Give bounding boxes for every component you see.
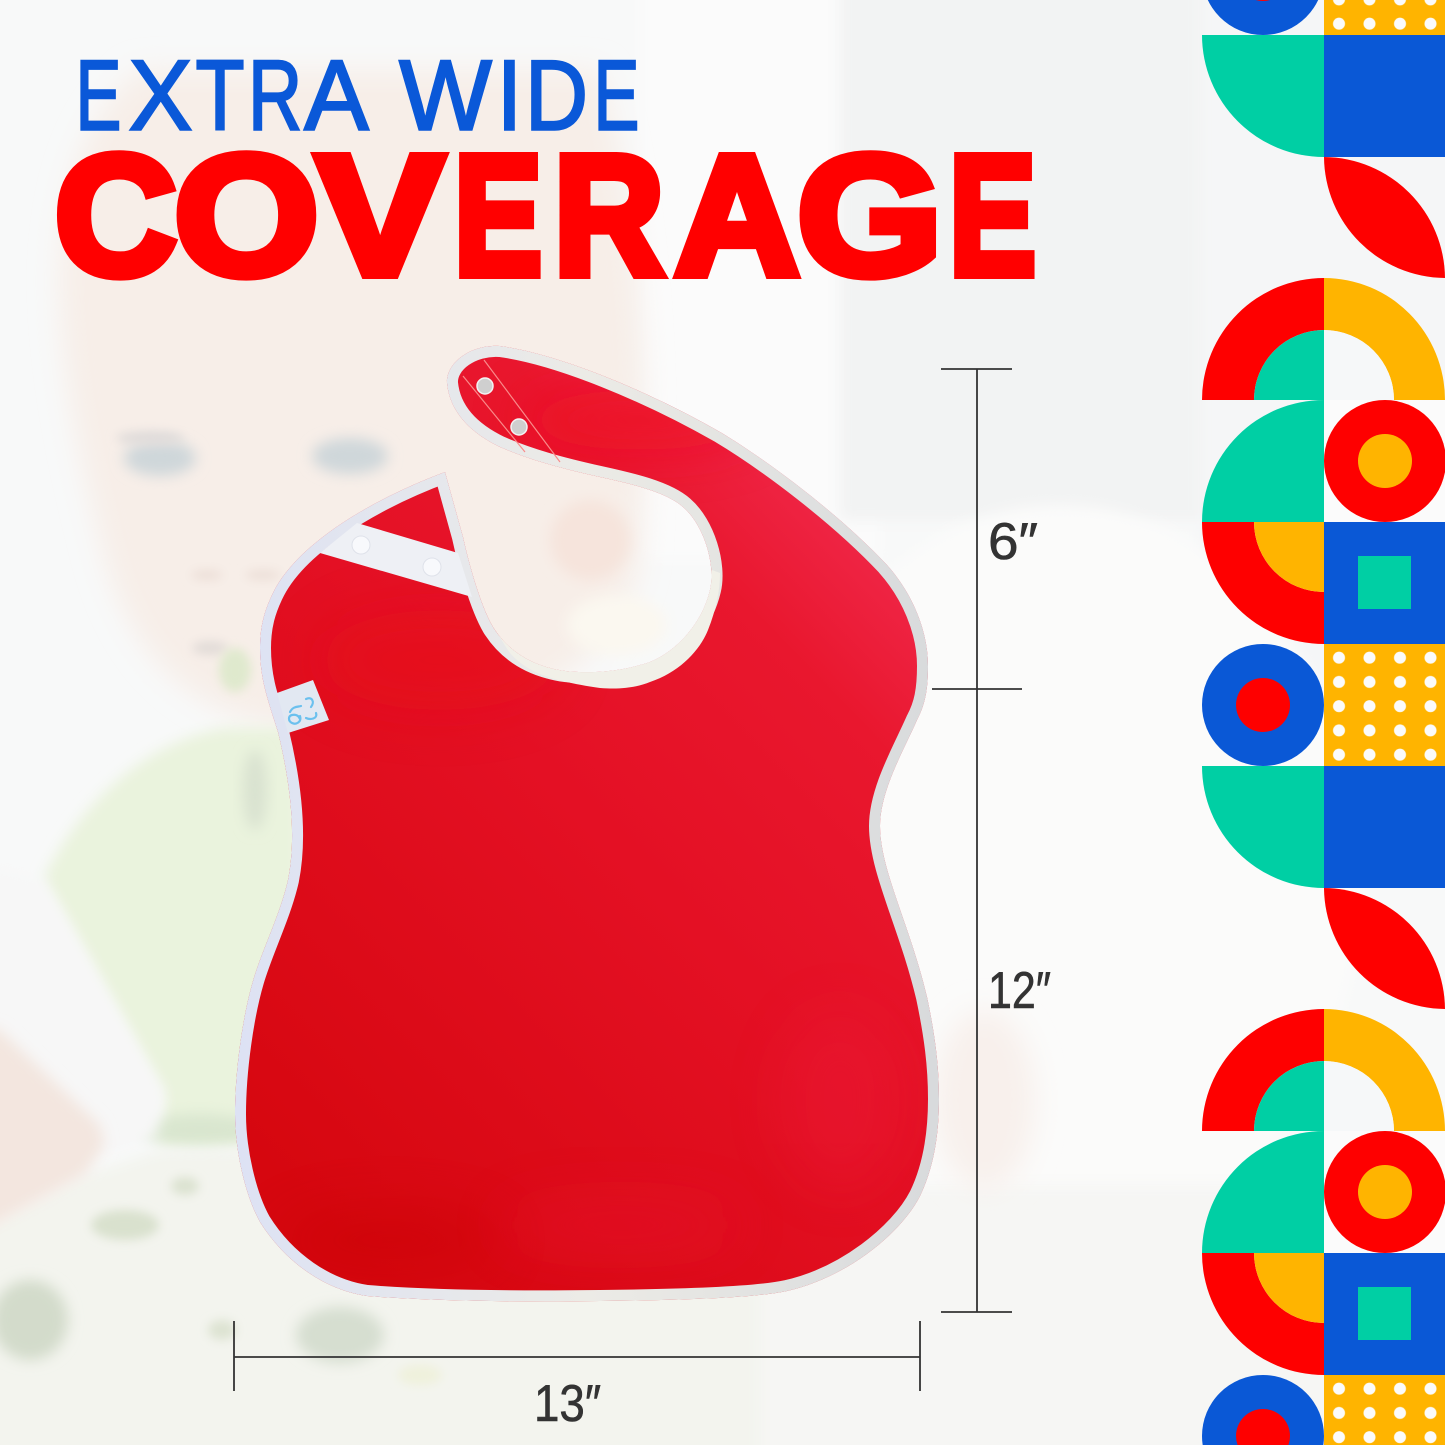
snap buttons bbox=[477, 378, 527, 435]
dimension line: vertical with ticks bbox=[932, 369, 1022, 1312]
neck binding fold bbox=[498, 570, 720, 688]
pattern: repeat block 1 bbox=[1202, 35, 1445, 766]
title: EXTRA WIDE: E bbox=[76, 41, 121, 152]
label: 12 inches: 12″ bbox=[988, 962, 1051, 1020]
title: EXTRA WIDE: A bbox=[304, 41, 369, 152]
title: EXTRA WIDE: I bbox=[497, 41, 522, 152]
title: COVERAGE: G bbox=[797, 121, 942, 311]
title: COVERAGE: R bbox=[554, 121, 664, 311]
label: 13 inches: 13″ bbox=[534, 1375, 601, 1433]
title: EXTRA WIDE: T bbox=[196, 41, 244, 152]
dimension line: horizontal with ticks bbox=[234, 1321, 920, 1391]
bib body bbox=[235, 346, 939, 1301]
geometric pattern column bbox=[1202, 0, 1445, 1445]
pattern: top partial row bbox=[1202, 0, 1445, 35]
label: 6 inches: 6″ bbox=[988, 513, 1038, 571]
title: COVERAGE: C bbox=[55, 121, 176, 311]
title: EXTRA WIDE bbox=[76, 41, 639, 152]
pattern: repeat block 2 bbox=[1202, 766, 1445, 1445]
title: EXTRA WIDE: X bbox=[129, 41, 192, 152]
photo details: eyes, nose, mouth, food bbox=[0, 431, 667, 1385]
title: COVERAGE bbox=[55, 121, 1036, 311]
title: COVERAGE: V bbox=[317, 121, 443, 311]
title: COVERAGE: E bbox=[454, 121, 542, 311]
title: COVERAGE: E bbox=[949, 121, 1036, 311]
brand tag bbox=[277, 680, 329, 733]
title: EXTRA WIDE: E bbox=[594, 41, 639, 152]
fabric shading bbox=[280, 390, 900, 1270]
white strap with snaps bbox=[320, 523, 472, 597]
title: EXTRA WIDE: D bbox=[525, 41, 588, 152]
title: COVERAGE: O bbox=[174, 121, 319, 311]
title: EXTRA WIDE: R bbox=[248, 41, 302, 152]
bib white binding bbox=[235, 346, 939, 1301]
product: red bib bbox=[235, 346, 939, 1301]
title: COVERAGE: A bbox=[675, 121, 799, 311]
tab stitching bbox=[463, 360, 560, 462]
title: EXTRA WIDE: W bbox=[399, 41, 492, 152]
